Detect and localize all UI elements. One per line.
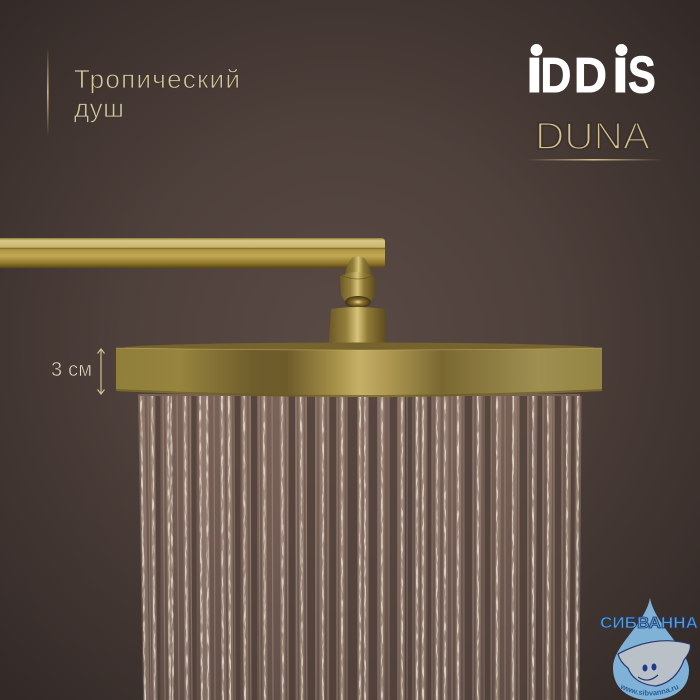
sparkling highlights <box>141 396 578 700</box>
tub face <box>638 664 658 680</box>
brand name: СИБВАННА <box>600 615 698 632</box>
icon: height arrow <box>98 349 104 394</box>
gold underline <box>526 159 662 160</box>
heading: product type: душ <box>74 93 124 123</box>
dark gaps between streams <box>158 396 572 700</box>
logo: IDDIS: i <box>612 34 629 106</box>
logo: IDDIS: S <box>628 45 656 104</box>
swivel connector <box>329 256 386 343</box>
collection name: DUNA: DUNA <box>535 116 651 158</box>
watermark: Sibvanna <box>600 598 698 700</box>
bathtub <box>618 641 690 686</box>
secondary thin streams <box>148 396 562 700</box>
site url: www.sibvanna.ru <box>620 684 679 696</box>
water drop <box>613 598 689 700</box>
shower arm <box>0 238 385 268</box>
water streams <box>138 394 580 700</box>
dimension: 3 cm <box>51 349 104 394</box>
logo: IDDIS: i <box>526 34 543 106</box>
logo: IDDIS: D <box>574 49 607 103</box>
soft stream bands <box>142 396 579 700</box>
round shower head <box>116 342 602 397</box>
heading: product type <box>74 64 240 123</box>
heading: product type: Тропический <box>74 64 240 94</box>
dimension: 3 cm: 3 см <box>51 359 92 381</box>
solid stream cores <box>141 396 578 700</box>
logo: IDDIS: D <box>540 47 571 103</box>
vertical accent line <box>47 48 49 136</box>
logo: IDDIS <box>530 44 654 94</box>
